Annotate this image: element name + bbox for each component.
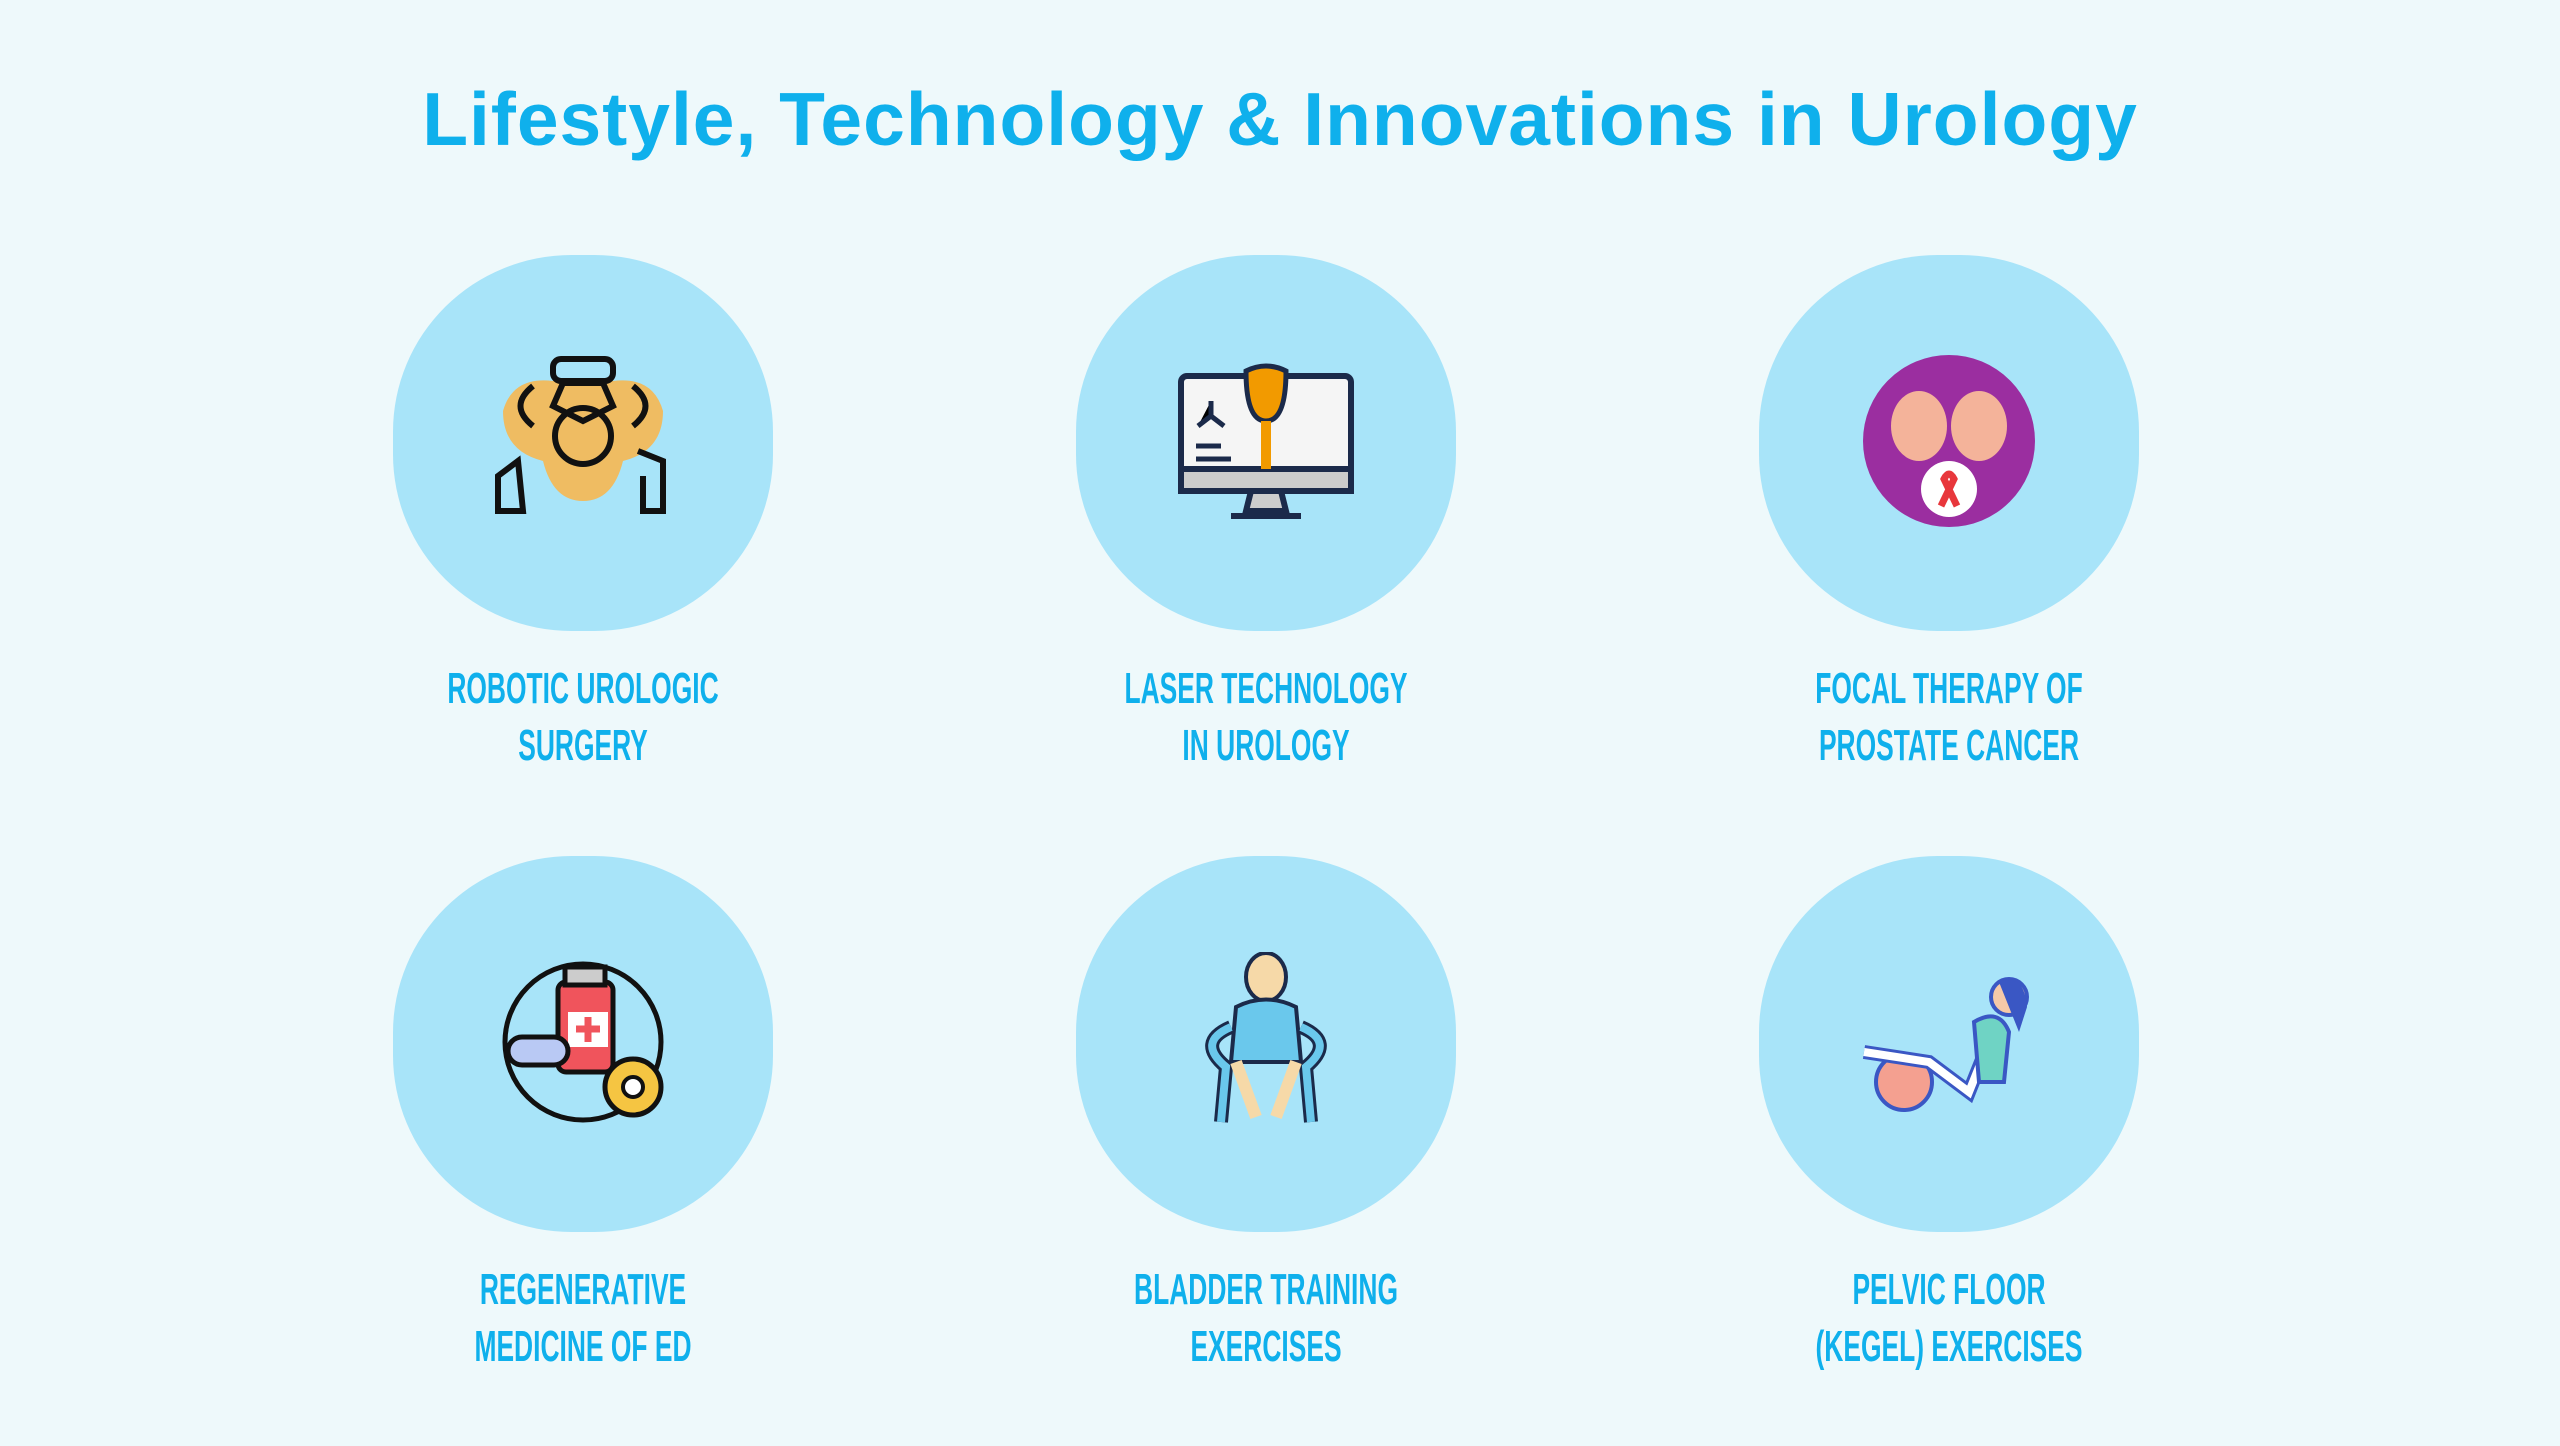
icon: monitor bladder bbox=[1178, 364, 1354, 519]
label: bladder training: BLADDER TRAINING bbox=[1134, 1265, 1398, 1314]
label: focal therapy bbox=[1815, 664, 2083, 770]
icon: medicine bottle cycle bbox=[502, 962, 664, 1122]
label: robotic surgery: ROBOTIC UROLOGIC bbox=[447, 664, 719, 713]
icon: squatting person bbox=[1205, 952, 1327, 1123]
label: regenerative medicine: REGENERATIVE bbox=[480, 1265, 686, 1314]
icon: kidneys ribbon bbox=[1863, 355, 2035, 527]
panel: focal therapy bbox=[1759, 255, 2139, 631]
label: laser technology bbox=[1124, 664, 1408, 770]
label: laser technology: IN UROLOGY bbox=[1182, 721, 1350, 770]
label: pelvic floor: (KEGEL) EXERCISES bbox=[1816, 1322, 2082, 1371]
panel: laser technology bbox=[1076, 255, 1456, 631]
label: pelvic floor: PELVIC FLOOR bbox=[1852, 1265, 2046, 1314]
label: laser technology: LASER TECHNOLOGY bbox=[1124, 664, 1408, 713]
panel: bladder training bbox=[1076, 856, 1456, 1232]
label: focal therapy: PROSTATE CANCER bbox=[1819, 721, 2079, 770]
panel: pelvic floor bbox=[1759, 856, 2139, 1232]
label: pelvic floor bbox=[1816, 1265, 2082, 1371]
icon: woman exercise ball bbox=[1862, 977, 2029, 1112]
label: regenerative medicine bbox=[474, 1265, 692, 1371]
label: robotic surgery bbox=[447, 664, 719, 770]
label: focal therapy: FOCAL THERAPY OF bbox=[1815, 664, 2083, 713]
label: regenerative medicine: MEDICINE OF ED bbox=[474, 1322, 692, 1371]
label: bladder training bbox=[1134, 1265, 1398, 1371]
icon: pelvis robot bbox=[495, 356, 666, 514]
label: robotic surgery: SURGERY bbox=[518, 721, 648, 770]
title: Lifestyle, Technology & Innovations in Urology bbox=[422, 77, 2138, 161]
panel: robotic surgery bbox=[393, 255, 773, 631]
label: bladder training: EXERCISES bbox=[1190, 1322, 1342, 1371]
panel: regenerative medicine bbox=[393, 856, 773, 1232]
